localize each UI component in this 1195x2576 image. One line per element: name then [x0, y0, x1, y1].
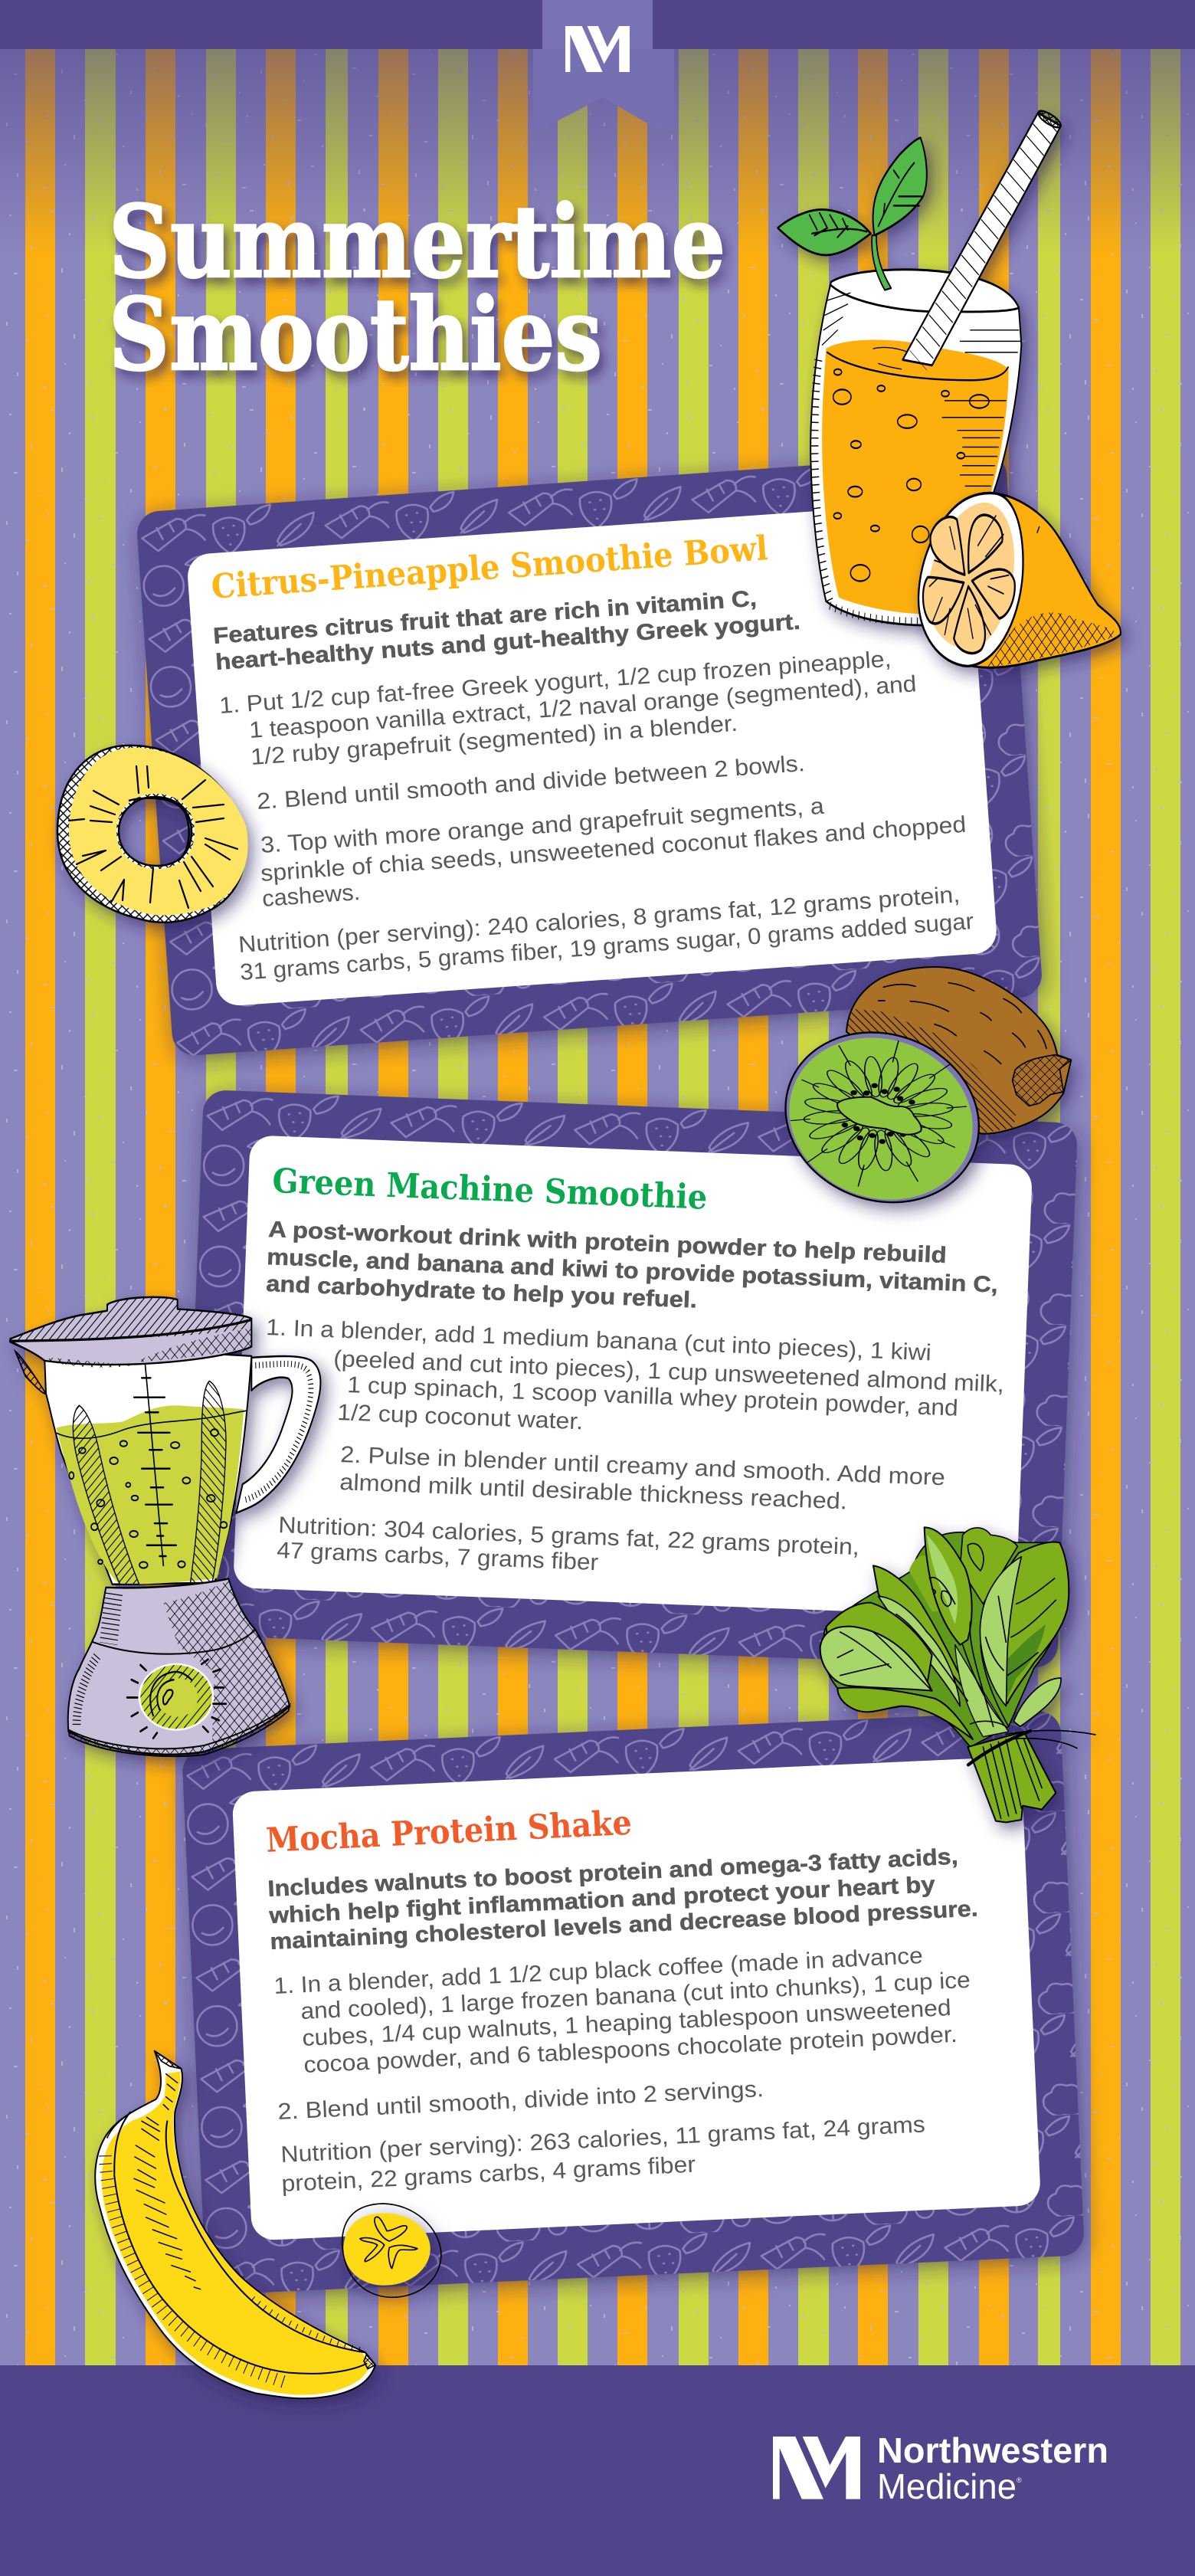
recipe steps: 2. Blend until smooth and divide between 2 bowls. [256, 751, 806, 814]
footer logo [773, 2430, 1108, 2506]
title: Smoothies [109, 276, 602, 393]
title [109, 183, 725, 393]
recipe steps: 1. In a blender, add 1 medium banana (cut into pieces), 1 kiwi [266, 1315, 931, 1365]
blender liquid [56, 1405, 244, 1585]
recipe steps: (peeled and cut into pieces), 1 cup unsweetened almond milk, [333, 1346, 1004, 1398]
icon: NM monogram [773, 2437, 860, 2499]
recipe steps: cubes, 1/4 cup walnuts, 1 heaping tablespoon unsweetened [302, 1995, 951, 2051]
icon: banana slice [342, 2204, 441, 2297]
recipe steps: 3. Top with more orange and grapefruit segments, a [260, 794, 825, 858]
recipe intro: and carbohydrate to help you refuel. [266, 1271, 698, 1313]
recipe heading: Citrus-Pineapple Smoothie Bowl [210, 529, 769, 607]
header banner [0, 0, 1195, 134]
recipe steps: 1 teaspoon vanilla extract, 1/2 naval orange (segmented), and [248, 671, 917, 743]
recipe steps: 2. Pulse in blender until creamy and smooth. Add more [340, 1442, 945, 1490]
recipe steps: sprinkle of chia seeds, unsweetened coconut flakes and chopped [260, 812, 967, 887]
blender dial [139, 1663, 214, 1731]
nutrition: protein, 22 grams carbs, 4 grams fiber [281, 2152, 696, 2197]
nutrition: Nutrition (per serving): 263 calories, 11 grams fat, 24 grams [280, 2112, 925, 2168]
recipe steps: 1. Put 1/2 cup fat-free Greek yogurt, 1/2 cup frozen pineapple, [218, 647, 892, 719]
panel: citrus-pineapple smoothie bowl [136, 452, 1043, 1057]
recipe heading: Mocha Protein Shake [265, 1804, 633, 1860]
card background [136, 452, 1043, 1057]
recipe heading: Green Machine Smoothie [272, 1162, 708, 1218]
mint leaves [778, 138, 927, 290]
recipe steps: 1/2 ruby grapefruit (segmented) in a blender. [250, 711, 738, 770]
icon: kiwi [761, 967, 1071, 1229]
card background [182, 1710, 1085, 2295]
recipe intro [267, 1844, 978, 1955]
recipe steps: and cooled), 1 large frozen banana (cut into chunks), 1 cup ice [300, 1968, 971, 2024]
nutrition: Nutrition: 304 calories, 5 grams fat, 22 grams protein, [278, 1512, 859, 1560]
panel: green machine smoothie [183, 1090, 1078, 1668]
nutrition: Nutrition (per serving): 240 calories, 8 grams fat, 12 grams protein, [237, 882, 961, 958]
recipe steps: cocoa powder, and 6 tablespoons chocolate protein powder. [303, 2022, 958, 2078]
recipe intro: Includes walnuts to boost protein and omega-3 fatty acids, [267, 1844, 958, 1902]
recipe intro [212, 585, 801, 675]
recipe steps [218, 647, 967, 912]
icon: smoothie glass with straw and mint [778, 108, 1062, 625]
card background [183, 1090, 1078, 1668]
recipe steps: 2. Blend until smooth, divide into 2 servings. [277, 2076, 764, 2125]
blender handle [236, 1356, 320, 1513]
title: Summertime [109, 183, 725, 300]
icon: blender [10, 1297, 320, 1756]
recipe steps [266, 1315, 1004, 1514]
blender jar [10, 1342, 251, 1585]
recipe steps: almond milk until desirable thickness reached. [339, 1470, 848, 1514]
logo: NM monogram [565, 26, 630, 72]
recipe steps: cashews. [261, 880, 361, 912]
footer bar [0, 2365, 1195, 2576]
nutrition [280, 2112, 925, 2197]
blender lid [10, 1297, 251, 1365]
wordmark: Medicine [877, 2466, 1017, 2506]
nutrition: 31 grams carbs, 5 grams fiber, 19 grams sugar, 0 grams added sugar [239, 909, 974, 985]
recipe steps: 1 cup spinach, 1 scoop vanilla whey protein powder, and [347, 1372, 958, 1421]
bubbles [833, 369, 989, 581]
nutrition: 47 grams carbs, 7 grams fiber [277, 1538, 599, 1575]
wordmark: ® [1017, 2476, 1022, 2484]
panel: mocha protein shake [182, 1710, 1085, 2295]
recipe steps: 1/2 cup coconut water. [337, 1400, 584, 1434]
wordmark: Northwestern [877, 2430, 1108, 2470]
recipe steps [273, 1943, 971, 2125]
icon: halved lemon [917, 493, 1121, 668]
blender base [68, 1578, 290, 1755]
straw [902, 108, 1062, 365]
recipe steps: 1. In a blender, add 1 1/2 cup black coffee (made in advance [273, 1943, 923, 1999]
icon: spinach bunch [820, 1527, 1095, 1822]
icon: banana [95, 2051, 375, 2398]
recipe intro: A post-workout drink with protein powder to help rebuild [268, 1217, 947, 1268]
recipe intro: which help fight inflammation and protect your heart by [268, 1872, 936, 1929]
recipe intro: maintaining cholesterol levels and decrease blood pressure. [270, 1896, 978, 1955]
recipe intro: Features citrus fruit that are rich in vitamin C, [212, 585, 758, 649]
recipe intro: heart-healthy nuts and gut-healthy Greek yogurt. [214, 609, 801, 675]
recipe intro [266, 1217, 998, 1313]
nutrition [237, 882, 974, 985]
recipe intro: muscle, and banana and kiwi to provide potassium, vitamin C, [267, 1244, 998, 1298]
nutrition [277, 1512, 859, 1575]
wordmark [877, 2430, 1108, 2506]
icon: pineapple ring [57, 746, 248, 923]
